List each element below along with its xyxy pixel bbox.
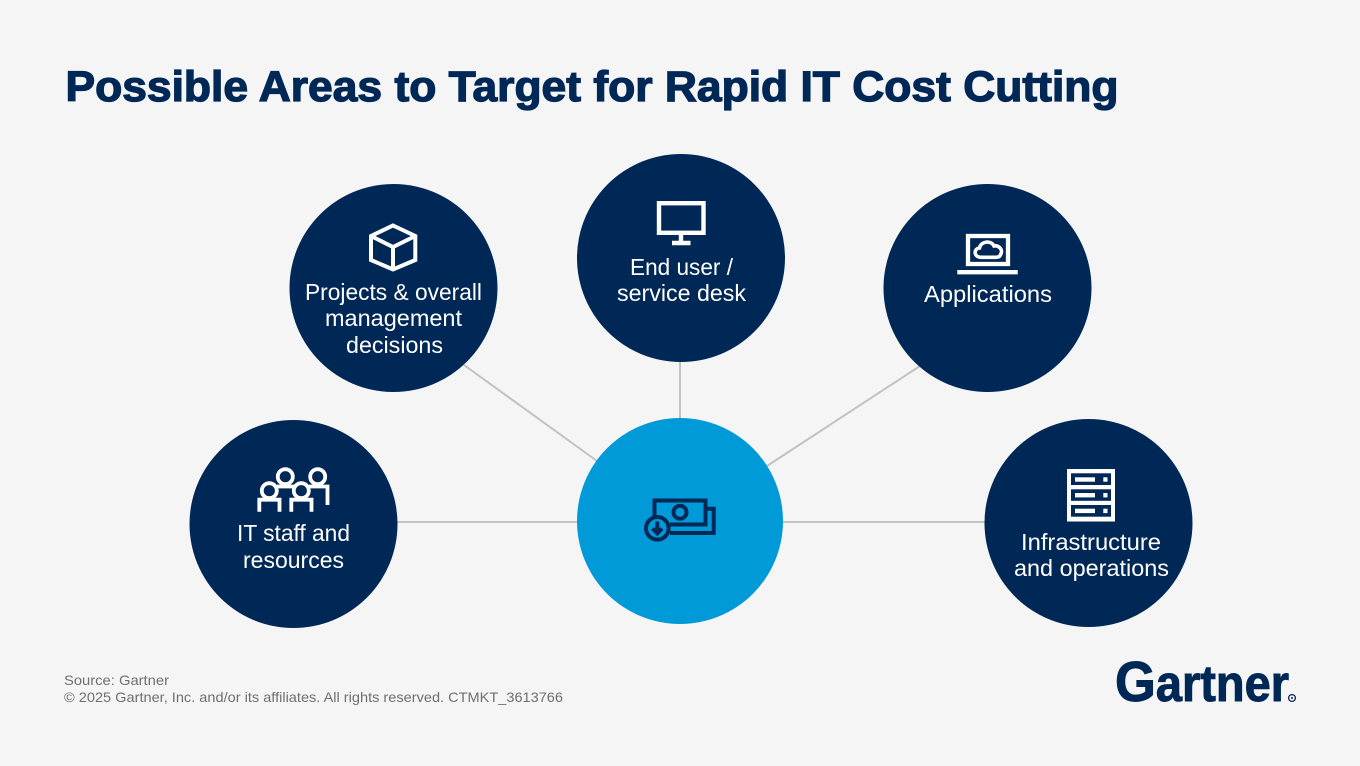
- panel: infrastructure and operations: [984, 419, 1192, 627]
- icon: box: [371, 226, 415, 270]
- source note: Source: Gartner: [64, 672, 169, 688]
- source note: © 2025 Gartner, Inc. and/or its affiliates. All rights reserved. CTMKT_3613766: [64, 689, 563, 705]
- label: infrastructure: Infrastructure: [1021, 529, 1161, 555]
- label: end user: [617, 254, 747, 306]
- label: end user: service desk: [617, 280, 747, 306]
- icon: laptop with cloud: [957, 236, 1018, 272]
- source note: [64, 672, 563, 705]
- label: projects: [305, 279, 482, 358]
- panel: end user / service desk: [577, 154, 785, 362]
- label: IT staff: [237, 520, 350, 573]
- icon: people group: [259, 469, 328, 512]
- panel: IT staff and resources: [190, 420, 398, 628]
- label: projects: management: [325, 305, 463, 331]
- panel: applications: [884, 184, 1092, 392]
- label: infrastructure: and operations: [1014, 555, 1169, 581]
- label: IT staff: resources: [243, 547, 344, 573]
- panel: projects and overall management decisions: [290, 184, 498, 392]
- label: projects: decisions: [346, 332, 443, 358]
- panel: center cost cutting hub: [577, 418, 783, 624]
- icon: banknotes with down arrow: [646, 500, 714, 540]
- label: end user: End user /: [630, 254, 734, 280]
- label: projects: Projects & overall: [305, 279, 482, 305]
- Gartner logo: Gartner: [1115, 650, 1289, 714]
- label: infrastructure: [1014, 529, 1169, 581]
- icon: monitor: [659, 203, 704, 243]
- icon: server rack: [1067, 469, 1115, 522]
- title: Possible Areas to Target for Rapid IT Cost Cutting: [66, 63, 1118, 111]
- label: applications: Applications: [924, 281, 1052, 307]
- label: IT staff: IT staff and: [237, 520, 350, 546]
